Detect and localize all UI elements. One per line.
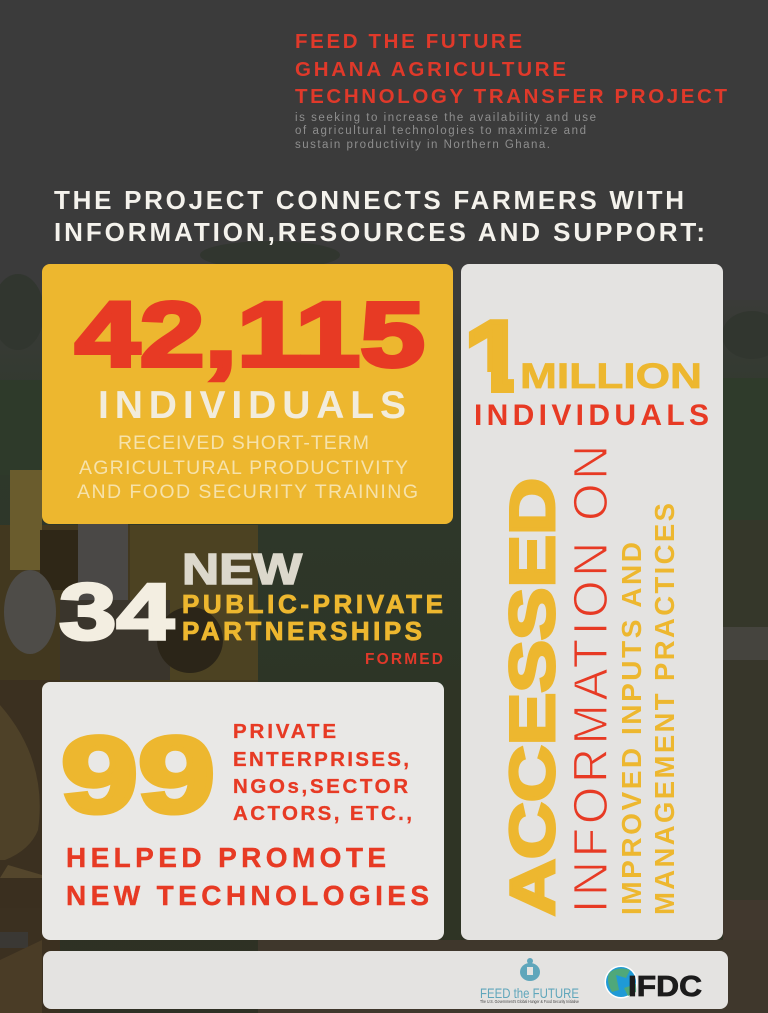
label: new: NEW — [182, 545, 303, 594]
label: public-private partnerships — [182, 589, 443, 646]
label: formed: FORMED — [365, 651, 443, 668]
panel: 99 private enterprises — [42, 682, 444, 940]
project title — [295, 30, 727, 108]
label: public-private partnerships: PUBLIC-PRIVATE — [182, 589, 443, 619]
irrigation machine — [0, 470, 258, 685]
project title: GHANA AGRICULTURE — [295, 58, 566, 81]
footer panel — [43, 951, 728, 1009]
label: million: MILLION — [520, 357, 702, 396]
logo: Feed the Future: FEED the FUTURE — [480, 985, 579, 1001]
logo: IFDC: IFDC — [628, 971, 702, 1003]
label: enterprise types — [233, 720, 412, 825]
vertical text: accessed: ACCESSED — [498, 478, 568, 916]
project title: TECHNOLOGY TRANSFER PROJECT — [295, 85, 727, 108]
logo: Feed the Future — [480, 958, 579, 1004]
icon: seal — [520, 958, 540, 981]
stat: 34: 34 — [59, 567, 175, 656]
description: training: AGRICULTURAL PRODUCTIVITY — [79, 457, 408, 479]
project description — [295, 112, 596, 151]
label: enterprise types: ENTERPRISES, — [233, 748, 409, 771]
main heading — [54, 185, 705, 247]
vertical text: information on: INFORMATION ON — [565, 445, 618, 913]
label: helped promote new technologies: NEW TECHNOLOGIES — [66, 880, 429, 911]
label: enterprise types: ACTORS, ETC., — [233, 802, 412, 825]
vertical text: improved inputs and: IMPROVED INPUTS AND — [616, 542, 647, 915]
panel: 1 million individuals — [461, 264, 723, 940]
label: public-private partnerships: PARTNERSHIPS — [182, 616, 422, 646]
description: training — [77, 432, 418, 503]
stat block: 34 new partnerships — [59, 545, 443, 668]
label: individuals: INDIVIDUALS — [474, 399, 709, 432]
label: enterprise types: PRIVATE — [233, 720, 336, 743]
logo: IFDC — [604, 966, 702, 1003]
main heading: INFORMATION,RESOURCES AND SUPPORT: — [54, 217, 705, 247]
logo: Feed the Future: The U.S. Government's Global Hunger & Food Security Initiative — [480, 999, 579, 1004]
label: individuals: INDIVIDUALS — [98, 384, 406, 427]
stat: 99: 99 — [61, 714, 215, 835]
label: helped promote new technologies — [66, 842, 429, 911]
intro text block — [295, 30, 727, 151]
main heading: THE PROJECT CONNECTS FARMERS WITH — [54, 185, 684, 215]
trees on the horizon — [0, 241, 768, 359]
label: enterprise types: NGOs,SECTOR — [233, 775, 408, 798]
storage tank — [0, 680, 60, 1013]
vertical text: management practices: MANAGEMENT PRACTICES — [649, 503, 680, 915]
stat: 1: 1 — [464, 300, 526, 414]
stat: 42,115: 42,115 — [75, 284, 425, 386]
project description: is seeking to increase the availability and use — [295, 112, 596, 124]
description: training: RECEIVED SHORT-TERM — [118, 432, 369, 454]
label: helped promote new technologies: HELPED PROMOTE — [66, 842, 386, 873]
panel: 42,115 individuals — [42, 264, 453, 524]
description: training: AND FOOD SECURITY TRAINING — [77, 481, 418, 503]
project title: FEED THE FUTURE — [295, 30, 522, 53]
project description: sustain productivity in Northern Ghana. — [295, 139, 550, 151]
icon: globe — [604, 966, 638, 998]
project description: of agricultural technologies to maximize and — [295, 125, 586, 137]
